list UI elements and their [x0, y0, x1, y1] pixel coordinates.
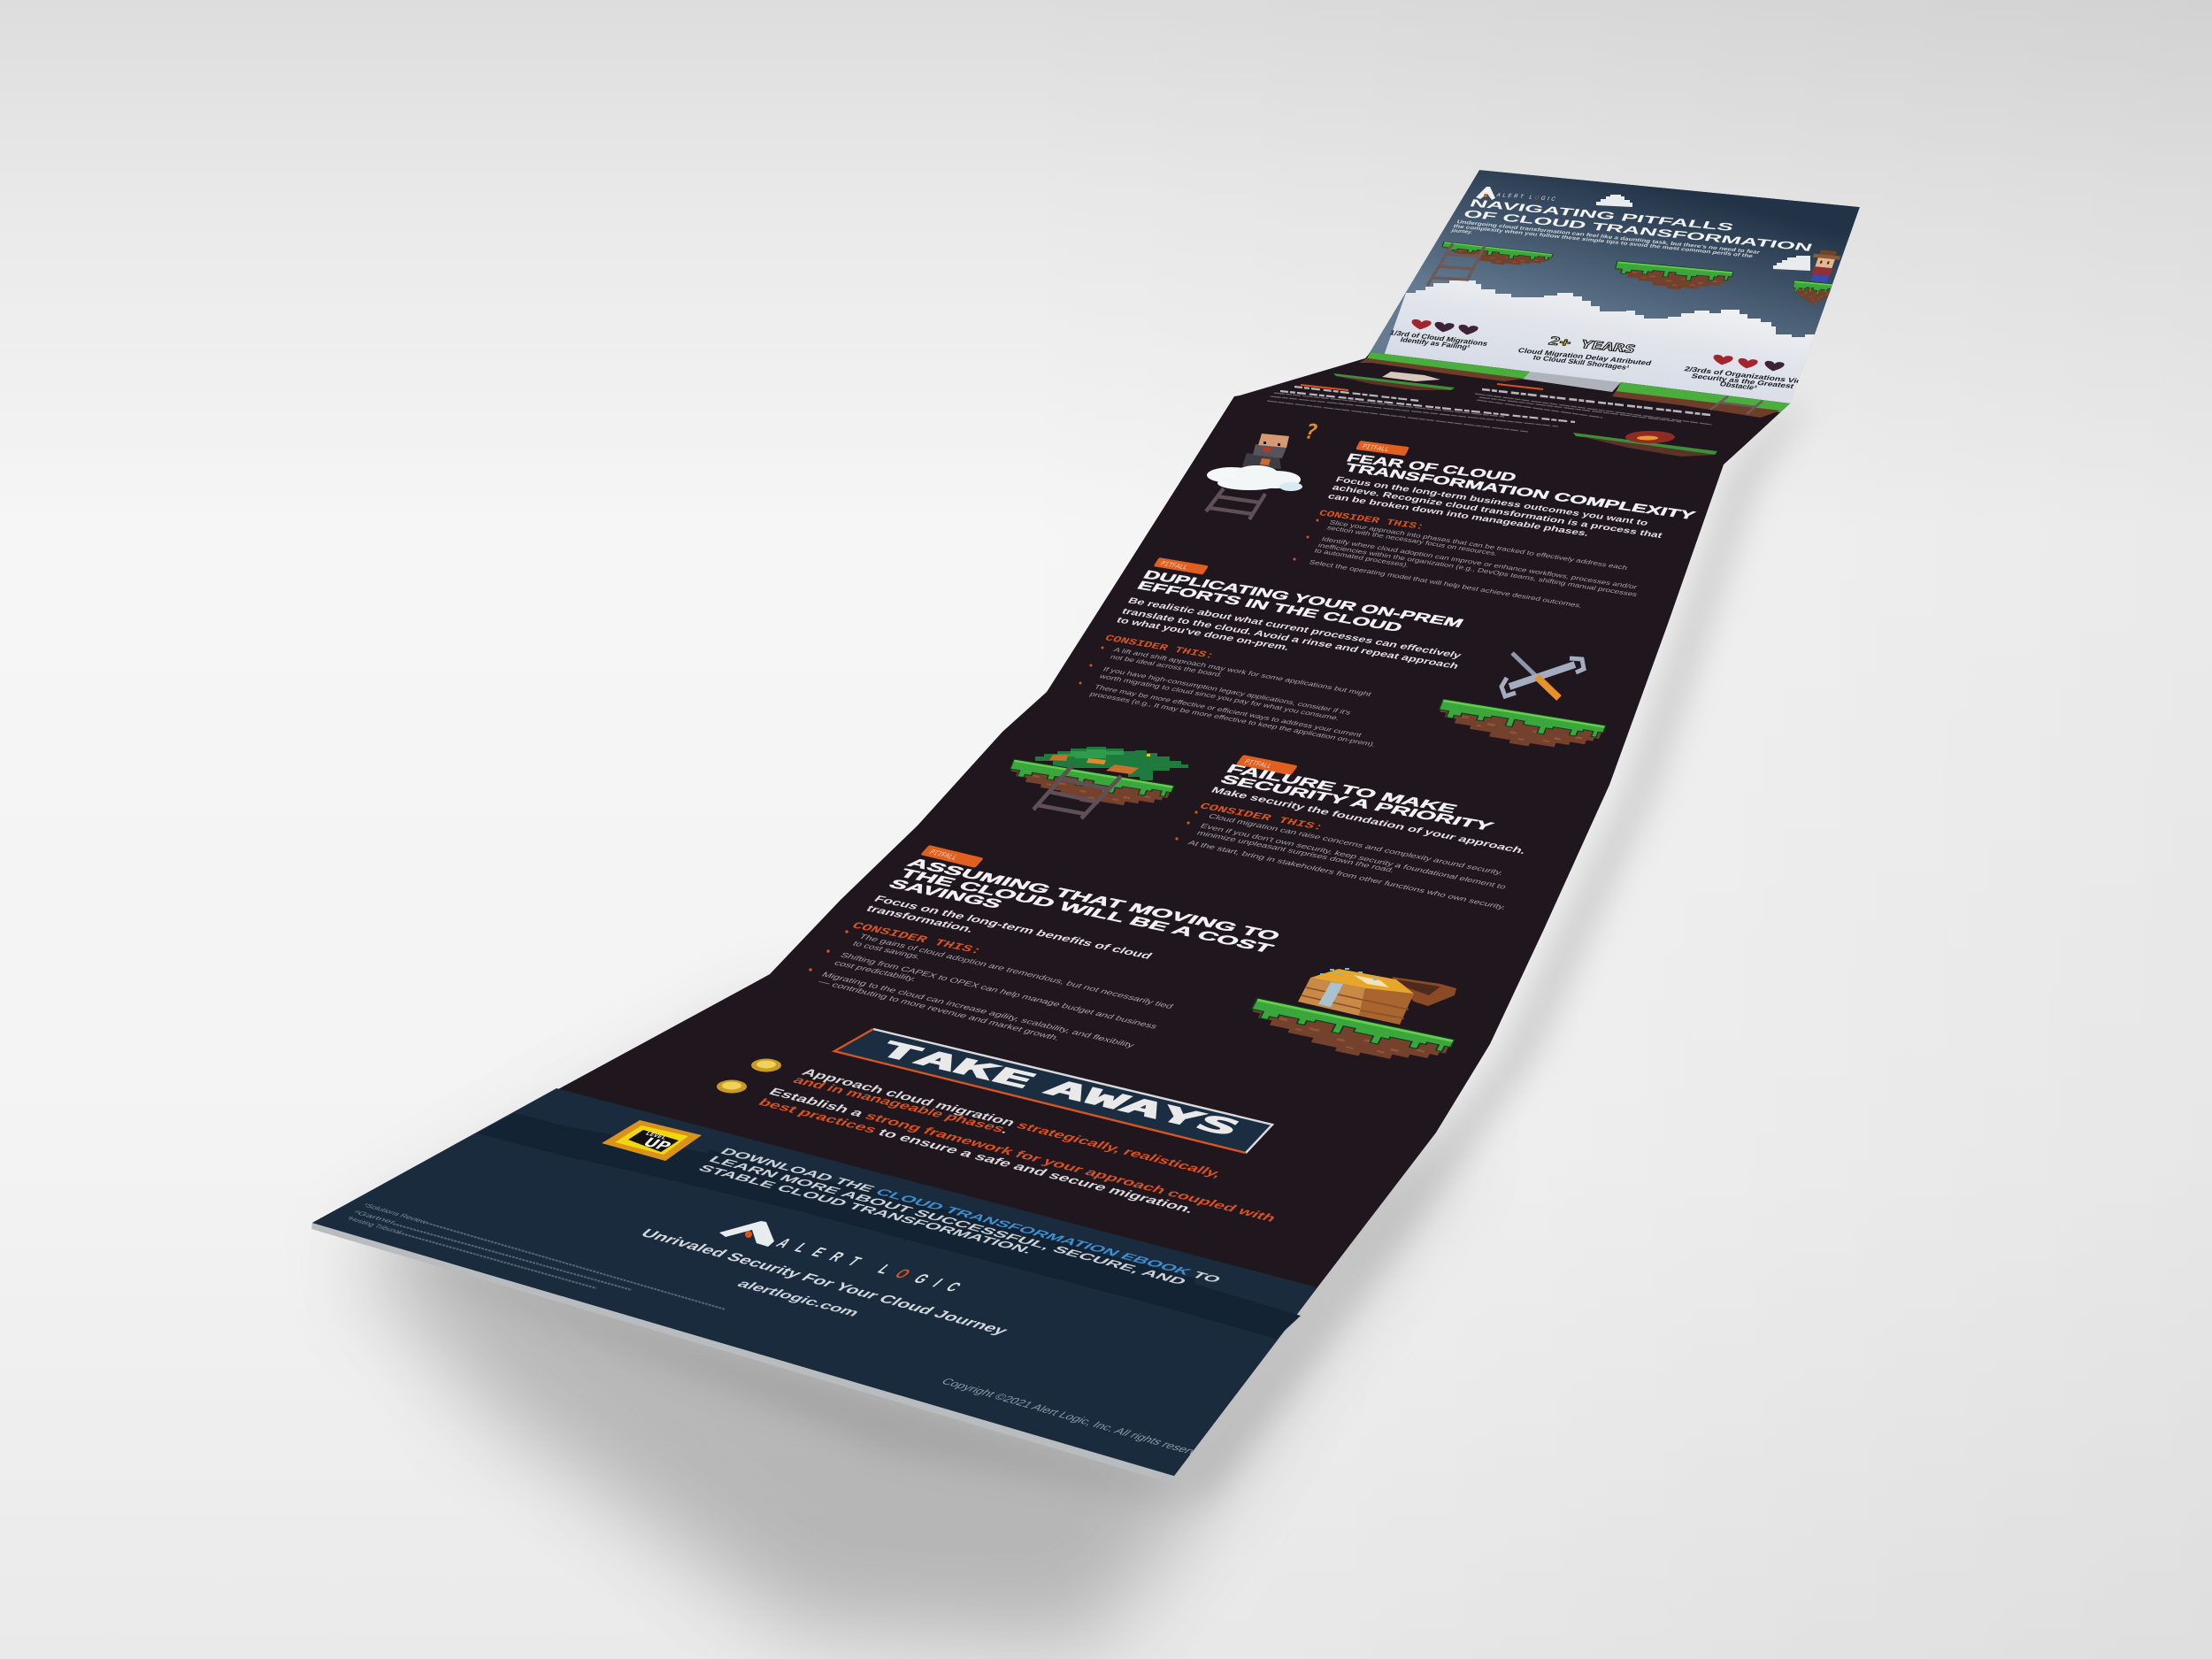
body: transformation. [864, 903, 977, 935]
sparkles [1320, 968, 1377, 980]
bullets: There may be more effective or efficient ways to address your current [1093, 684, 1363, 739]
consider this: CONSIDER THIS: [1196, 802, 1325, 833]
pitfall tag [1236, 755, 1298, 775]
pitfall tag: PITFALL [1242, 758, 1273, 771]
heading: SAVINGS [885, 877, 1006, 911]
icon: screwdriver and wrench [1502, 653, 1584, 698]
intro text: journey. [1449, 228, 1473, 235]
body [1114, 596, 1464, 672]
footnotes: ³Hosting Tribunal [344, 1216, 403, 1235]
stat: one third hearts: Identify as Failing¹ [1399, 335, 1472, 351]
takeaways text: best practices to ensure a safe and secure migration. [756, 1096, 1198, 1216]
body: Focus on the long-term benefits of cloud [872, 894, 1155, 961]
takeaways banner: TAKE AWAYS [870, 1037, 1248, 1141]
section 2: text [1079, 557, 1467, 749]
intro text [1449, 219, 1762, 259]
small platform with scroll [1333, 372, 1455, 390]
heading [885, 856, 1284, 956]
stat: two plus years: to Cloud Skill Shortages¹ [1532, 353, 1632, 372]
download call to action: LEARN MORE ABOUT SUCCESSFUL, SECURE, AND [705, 1155, 1189, 1286]
pixel dark band [477, 1113, 1301, 1339]
heading: THE CLOUD WILL BE A COST [895, 866, 1277, 956]
bullets [1079, 646, 1378, 749]
stat: two plus years: Cloud Migration Delay Attributed [1517, 346, 1653, 367]
character: explorer [1810, 250, 1840, 283]
footnotes [344, 1202, 726, 1310]
consider this: CONSIDER THIS: [1317, 508, 1426, 532]
pitfall tag: PITFALL [927, 849, 959, 862]
platform [1240, 998, 1455, 1072]
small cloud top [1596, 195, 1632, 207]
takeaways text: Approach cloud migration strategically, realistically, [799, 1066, 1225, 1179]
bullets: Identify where cloud adoption can improve or enhance workflows, processes and/or [1320, 536, 1639, 591]
body: can be broken down into manageable phases. [1326, 491, 1591, 538]
platform [1431, 699, 1606, 757]
pitfall tag [1356, 441, 1409, 457]
body [1326, 474, 1664, 540]
ladder [1033, 765, 1121, 818]
section 1: fear of complexity illustration [1206, 419, 1321, 519]
body: Be realistic about what current processes can effectively [1125, 596, 1464, 661]
takeaways text: Establish a strong framework for your approach coupled with [766, 1086, 1279, 1225]
platform [1002, 759, 1174, 815]
section 4: treasure chest illustration [1240, 968, 1456, 1072]
icon: coin one [751, 1058, 781, 1072]
logo: footer Alert Logic [719, 1221, 965, 1294]
intro text: the complexity when you follow these simple tips to avoid the most common perils of the [1452, 224, 1754, 259]
intro text: Undergoing cloud transformation can feel like a daunting task, but there's no need to fear [1455, 219, 1762, 256]
bullets: to automated processes). [1313, 548, 1409, 569]
fold strip [1521, 372, 1621, 392]
heading: EFFORTS IN THE CLOUD [1134, 578, 1406, 634]
pitfall tag: PITFALL [1361, 444, 1390, 454]
small cloud right [1773, 256, 1810, 271]
paper edge thickness [311, 1223, 1174, 1484]
cloud [1207, 465, 1302, 491]
logo: header Alert Logic: ALERT LOGIC [1495, 192, 1557, 203]
character: bearded man [1242, 434, 1289, 469]
title: NAVIGATING PITFALLS [1468, 197, 1736, 234]
heading: FEAR OF CLOUD [1345, 451, 1519, 484]
ladder in fold [1710, 396, 1763, 414]
pitfall tag [920, 845, 984, 868]
bullets: Migrating to the cloud can increase agility, scalability, and flexibility [819, 971, 1138, 1049]
level up badge [602, 1120, 702, 1161]
bullets: minimize unpleasant surprises down the road. [1195, 829, 1397, 874]
ground strip left [1367, 352, 1530, 379]
stat: one third hearts: 1/3rd of Cloud Migrations [1388, 328, 1489, 348]
body: Focus on the long-term business outcomes you want to [1334, 474, 1650, 527]
icon: coin two [717, 1079, 747, 1094]
heading [1134, 567, 1467, 634]
takeaways text [756, 1066, 1279, 1225]
stat: two thirds hearts: 2/3rds of Organizations View [1683, 365, 1810, 386]
bullets: section with the necessary focus on resources. [1325, 525, 1498, 557]
paper shadow [354, 405, 1805, 1646]
stat: one third hearts [1388, 319, 1489, 351]
stat: two thirds hearts: Security as the Greatest [1690, 372, 1796, 390]
takeaways text: and in manageable phases . [790, 1074, 1013, 1136]
stat: two plus years [1517, 334, 1653, 372]
copyright: Copyright ©2021 Alert Logic, Inc. All rights reserved [938, 1377, 1213, 1461]
bullets: At the start, bring in stakeholders from other functions who own security. [1187, 839, 1509, 911]
stat: two thirds hearts [1684, 354, 1799, 389]
heading: FAILURE TO MAKE [1223, 762, 1460, 817]
bullets: Even if you don't own security, keep security a foundational element to [1199, 822, 1509, 891]
treasure [1310, 969, 1414, 994]
section 4: text [809, 845, 1284, 1049]
body [864, 894, 1155, 961]
compressed heading and body left [1267, 385, 1575, 432]
chest lid [1392, 977, 1456, 1006]
section 3: text [1175, 755, 1529, 911]
bullets: Slice your approach into phases that can be tracked to effectively address each [1328, 519, 1629, 572]
heading: TRANSFORMATION COMPLEXITY [1343, 461, 1698, 522]
stat: two thirds hearts: Obstacle³ [1718, 380, 1759, 392]
level up badge: LEVEL [643, 1132, 668, 1141]
consider this: CONSIDER THIS: [849, 921, 984, 956]
bullets: The gains of cloud adoption are tremendous, but not necessarily tied [856, 933, 1175, 1010]
heading: ASSUMING THAT MOVING TO [903, 856, 1284, 943]
logo: header Alert Logic [1476, 187, 1557, 203]
ground strip right [1616, 382, 1790, 412]
bullets [1175, 810, 1509, 911]
pitfall tag: PITFALL [1158, 561, 1189, 572]
download call to action: DOWNLOAD THE CLOUD TRANSFORMATION EBOOK TO [717, 1147, 1224, 1285]
chest strap [1318, 982, 1343, 1007]
bullets [809, 930, 1175, 1049]
section 1: text [1294, 441, 1698, 610]
floating platform right [1791, 280, 1833, 305]
bullets: — contributing to more revenue and market growth. [816, 978, 1062, 1042]
floating platform left [1442, 241, 1554, 265]
cloud bank and stats background [1384, 280, 1815, 404]
bullets: not be ideal across the board. [1109, 654, 1225, 679]
heading [1343, 451, 1698, 522]
heading [1217, 762, 1497, 834]
bullets: cost predictability. [832, 959, 918, 983]
ladder [1206, 488, 1265, 519]
panel: header sky [1363, 170, 1860, 416]
body: achieve. Recognize cloud transformation is a process that [1331, 482, 1664, 540]
pitfall tag [1153, 557, 1209, 575]
ladder [1427, 243, 1485, 286]
body: Make security the foundation of your approach. [1209, 786, 1529, 856]
bullets: worth migrating to cloud since you pay for what you consume. [1096, 672, 1341, 722]
bullets: If you have high-consumption legacy applications, consider if it's [1102, 666, 1353, 717]
tagline: Unrivaled Security For Your Cloud Journey [636, 1227, 1012, 1338]
crocodile [1035, 747, 1188, 780]
bullets: A lift and shift approach may work for some applications but might [1112, 647, 1373, 698]
bullets: to cost savings. [850, 940, 923, 961]
stat: two plus years: 2+ YEARS [1547, 334, 1638, 356]
heading: DUPLICATING YOUR ON-PREM [1141, 567, 1467, 630]
compressed heading and body right [1475, 384, 1712, 425]
panel: compressed fold section [1267, 352, 1790, 457]
icon: question mark: ? [1301, 419, 1321, 444]
website: alertlogic.com [733, 1278, 864, 1318]
bullets: Cloud migration can raise concerns and complexity around security. [1207, 812, 1506, 877]
body: to what you've done on-prem. [1114, 616, 1292, 653]
bullets: Shifting from CAPEX to OPEX can help manage budget and business [838, 951, 1159, 1031]
bullets: inefficiencies within the organization (e.g., DevOps teams, shifting manual processes [1317, 542, 1639, 598]
small platform with creature [1573, 431, 1717, 457]
heading: SECURITY A PRIORITY [1217, 772, 1497, 834]
bullets: processes (e.g., It may be more effective to keep the application on-prem). [1088, 691, 1378, 749]
bullets [1294, 518, 1639, 610]
title [1462, 197, 1815, 254]
section 3: crocodile illustration [1002, 747, 1188, 818]
section 2: tools illustration [1431, 653, 1606, 757]
bullets: Select the operating model that will help best achieve desired outcomes. [1308, 559, 1583, 610]
level up badge: UP [640, 1135, 675, 1154]
download call to action: STABLE CLOUD TRANSFORMATION. [695, 1164, 1036, 1256]
logo: footer Alert Logic: ALERT LOGIC [772, 1235, 965, 1294]
takeaways banner [834, 1029, 1272, 1153]
title: OF CLOUD TRANSFORMATION [1462, 208, 1815, 254]
panel: dark body [312, 352, 1790, 1476]
footnotes: ²Gartner [351, 1210, 398, 1225]
panel: footer navy [312, 1088, 1317, 1476]
footnotes: ¹Solutions Review [361, 1202, 429, 1225]
consider this: CONSIDER THIS: [1102, 634, 1217, 661]
floating platform center [1615, 260, 1734, 290]
body: translate to the cloud. Avoid a rinse and repeat approach [1119, 607, 1461, 672]
chest front [1298, 978, 1365, 1016]
